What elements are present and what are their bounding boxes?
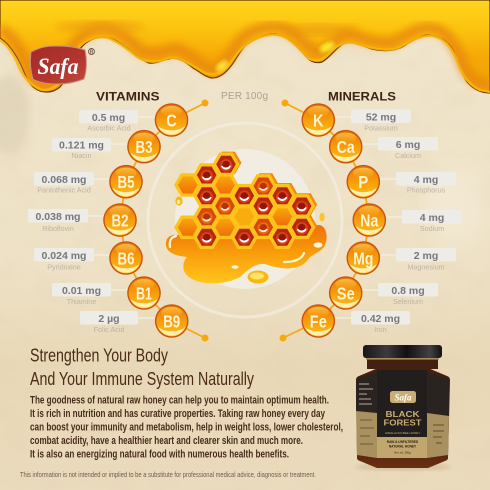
vitamin B1 (52, 276, 161, 310)
vitamin B2: Riboflovin (42, 224, 74, 233)
vitamin B6: B6 (118, 248, 135, 268)
label ticks (88, 117, 402, 318)
mineral Fe (302, 304, 410, 338)
jar neck (366, 356, 439, 369)
vitamin B3: 0.121 mg (59, 140, 104, 152)
body text: It is also an energizing natural food with numerous health benefits. (30, 448, 289, 460)
mineral K: K (313, 110, 324, 130)
mineral Ca (329, 130, 438, 164)
front label: BLACK (386, 410, 420, 419)
vitamin C: 0.5 mg (92, 112, 125, 124)
body text (30, 394, 343, 460)
main heading: Strengthen Your Body (30, 346, 168, 366)
body text: can boost your immunity and metabolism, help in weight loss, lower cholesterol, (30, 421, 343, 433)
disclaimer: This information is not intended or implied to be a substitute for professional medical advice, diagnosis or treatment. (20, 470, 316, 479)
mineral Mg (346, 241, 456, 275)
vitamin B9: 2 µg (98, 313, 120, 325)
body text: It is rich in nutrition and has curative properties. Taking raw honey every day (30, 408, 325, 420)
mineral Se: Selenium (393, 297, 423, 306)
heading: minerals: MINERALS (328, 90, 396, 104)
mineral Fe: 0.42 mg (361, 313, 400, 325)
jar body (356, 368, 450, 468)
mineral Se: 0.8 mg (391, 285, 425, 297)
main heading: And Your Immune System Naturally (30, 369, 254, 389)
front label: Safa (394, 392, 412, 402)
registered mark (88, 48, 94, 56)
front label: HIMALAYAN BEE HONEY (385, 431, 420, 435)
front label: RAW & UNFILTERED (387, 440, 419, 444)
vitamin B1: B1 (136, 283, 152, 303)
mineral P (346, 165, 456, 198)
small drips (175, 196, 325, 221)
vitamin B3 (52, 130, 161, 164)
comb walls (175, 153, 315, 248)
comb shadow (216, 152, 317, 237)
mineral Fe: Iron (374, 325, 387, 334)
vitamin B2 (28, 203, 137, 237)
connector lines (120, 100, 369, 341)
vitamin B1: 0.01 mg (62, 285, 101, 297)
honeycomb illustration (166, 152, 327, 284)
body text: The goodness of natural raw honey can help you to maintain optimum health. (30, 394, 329, 406)
vitamin C (79, 103, 188, 137)
vitamin B5: B5 (118, 172, 135, 192)
vitamin B6: 0.024 mg (42, 250, 86, 262)
main heading (30, 346, 254, 389)
front label (377, 370, 427, 458)
vitamin B6 (34, 241, 143, 275)
mineral Fe: Fe (310, 311, 327, 331)
vitamin B3: B3 (136, 137, 153, 157)
mineral Mg: Mg (353, 248, 373, 268)
logo: Safa (30, 46, 86, 84)
vitamin B5: Pantothenic Acid (37, 186, 91, 194)
mineral Na (352, 203, 462, 237)
vitamins column (28, 103, 188, 338)
heading: per 100g: PER 100g (221, 91, 268, 102)
side panel left (356, 372, 377, 458)
front label: Net. wt. 350g (394, 450, 411, 454)
mineral Se (329, 276, 438, 310)
vitamin C: C (166, 110, 177, 130)
mineral K (302, 103, 411, 137)
mineral K: Potassium (364, 124, 398, 132)
vitamin B9: Folic Acid (94, 325, 124, 334)
vitamin B9 (80, 304, 188, 338)
vitamin B9: B9 (163, 311, 180, 331)
vitamin B5 (34, 165, 143, 198)
vitamin B3: Niacin (72, 151, 91, 160)
mineral Ca: Ca (337, 137, 355, 157)
mineral P: Phosphorus (407, 186, 446, 194)
jar lid (363, 345, 442, 358)
honey puddle (166, 225, 327, 284)
body text: combat acidity, have a healthier heart and clearer skin and much more. (30, 435, 303, 447)
jar shadow (355, 464, 451, 470)
honey drip across the top (0, 0, 490, 93)
front label: NATURAL HONEY (389, 444, 417, 448)
vitamin B1: Thiamine (67, 297, 96, 306)
front label: FOREST (384, 418, 422, 428)
vitamin C: Ascorbic Acid (87, 124, 131, 132)
mineral P: P (358, 172, 369, 192)
vitamin B6: Pyridoxine (47, 262, 81, 272)
product jar (355, 345, 451, 470)
heading: vitamins: VITAMINS (96, 90, 160, 104)
comb cells (178, 156, 312, 246)
registered mark: R (90, 50, 94, 56)
mineral Ca: Calcium (395, 151, 421, 160)
vitamin B2: 0.038 mg (36, 211, 80, 223)
mineral P: 4 mg (414, 174, 438, 186)
mineral K: 52 mg (366, 112, 396, 124)
mineral Mg: 2 mg (414, 250, 438, 262)
mineral Na: 4 mg (420, 212, 444, 224)
side panel right (427, 372, 449, 458)
faint orbit rings (148, 123, 342, 317)
mineral Na: Sodium (420, 224, 444, 233)
mineral Mg: Magnesium (407, 262, 445, 272)
mineral Se: Se (337, 283, 355, 303)
mineral Na: Na (360, 210, 379, 230)
mineral Ca: 6 mg (396, 139, 420, 151)
vitamin B5: 0.068 mg (42, 174, 86, 186)
logo: Safa: Safa (38, 54, 78, 79)
minerals column (302, 103, 462, 338)
vitamin B2: B2 (112, 210, 129, 230)
